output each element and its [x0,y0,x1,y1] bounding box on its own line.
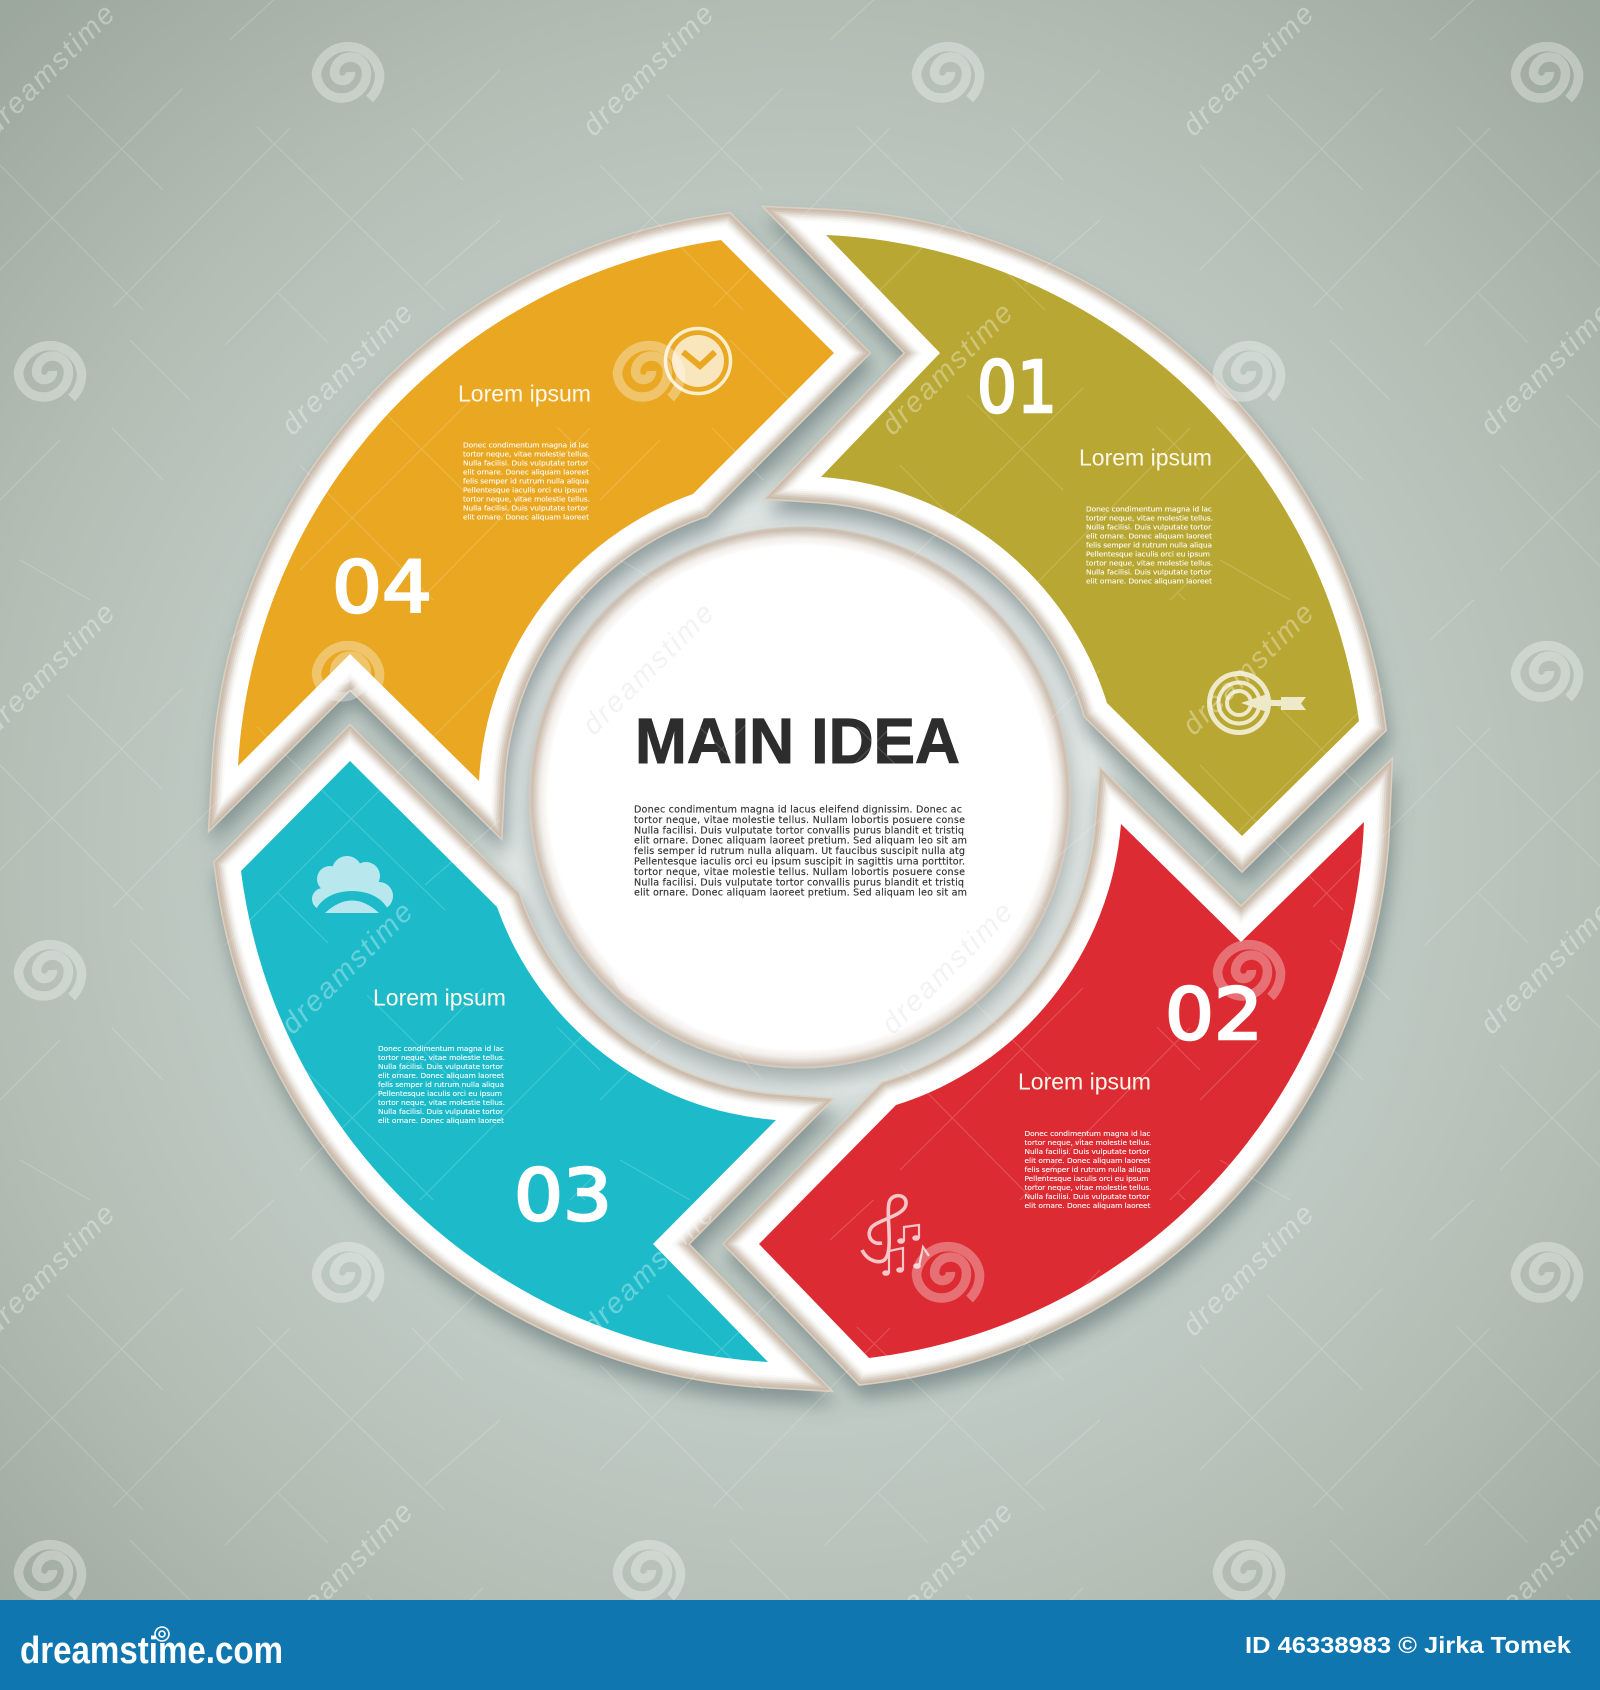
heading 01: Lorem ipsum [1079,444,1212,470]
body text 02: Nulla facilisi. Duis vulputate tortor [1024,1147,1150,1156]
body text 02: elit ornare. Donec aliquam laoreet [1024,1201,1151,1210]
body text 04: tortor neque, vitae molestie tellus. [463,450,590,458]
watermark overlay: dreamstime [275,1496,419,1640]
footer logo spiral [155,1627,169,1641]
inner light backing disc [465,463,1135,1133]
body text 03: felis semper id rutrum nulla aliqua [378,1080,504,1089]
central paragraph: tortor neque, vitae molestie tellus. Nullam lobortis posuere conse [634,867,965,878]
body text 02 [1024,1129,1152,1210]
number 03: 03 [514,1154,612,1237]
watermark overlay: dreamstime [875,896,1019,1040]
body text 01: Donec condimentum magna id lac [1086,504,1212,514]
panel: step 02 red arrow [759,822,1364,1358]
arrow shape teal [241,761,776,1362]
footer credit: ID 46338983 © Jirka Tomek [1245,1632,1571,1658]
central paragraph: elit ornare. Donec aliquam laoreet pretium. Sed aliquam leo sit am [634,836,967,847]
central paragraph: Donec condimentum magna id lacus eleifend dignissim. Donec ac [634,804,962,816]
body text 04: tortor neque, vitae molestie tellus. [463,494,590,504]
body text 01: tortor neque, vitae molestie tellus. [1086,558,1213,568]
arrow shape orange [238,240,834,781]
footer bar [0,1600,1600,1690]
body text 02: Nulla facilisi. Duis vulputate tortor [1024,1192,1150,1201]
body text 02: elit ornare. Donec aliquam laoreet [1024,1156,1151,1165]
body text 04: felis semper id rutrum nulla aliqua [463,476,589,486]
body text 01: Nulla facilisi. Duis vulputate tortor [1086,522,1212,532]
central paragraph: elit ornare. Donec aliquam laoreet pretium. Sed aliquam leo sit am [634,888,967,899]
body text 01: tortor neque, vitae molestie tellus. [1086,514,1213,522]
central paragraph: tortor neque, vitae molestie tellus. Nullam lobortis posuere conse [634,815,965,826]
watermark overlay: dreamstime [275,297,419,441]
number 04: 04 [332,546,432,629]
footer logo text: dreamstime.com [20,1630,283,1672]
central paragraph: felis semper id rutrum nulla aliquam. Ut faucibus suscipit nulla atg [634,846,965,857]
body text 01 [1086,504,1213,586]
body text 03: Pellentesque iaculis orci eu ipsum [378,1089,502,1098]
body text 04: Donec condimentum magna id lac [463,440,589,450]
body text 01: Pellentesque iaculis orci eu ipsum [1086,550,1210,558]
number 01: 01 [977,346,1057,429]
central circle [529,526,1071,1068]
central paragraph [634,804,967,899]
body text 03: Nulla facilisi. Duis vulputate tortor [378,1107,504,1116]
icon: music notes [862,1196,929,1276]
icon: clock [666,328,730,394]
heading 03: Lorem ipsum [373,984,506,1010]
body text 03: elit ornare. Donec aliquam laoreet [378,1071,504,1080]
body text 04: elit ornare. Donec aliquam laoreet [463,512,589,522]
heading 04: Lorem ipsum [458,380,591,406]
watermark overlay: dreamstime [875,1496,1019,1640]
body text 02: Donec condimentum magna id lac [1024,1129,1150,1138]
body text 03: Nulla facilisi. Duis vulputate tortor [378,1062,504,1071]
body text 02: Pellentesque iaculis orci eu ipsum [1024,1174,1148,1183]
panel: step 04 orange arrow [238,240,834,781]
body text 03: tortor neque, vitae molestie tellus. [378,1053,505,1062]
watermark overlay: dreamstime [1176,0,1320,142]
watermark overlay: dreamstime [576,597,720,741]
watermark overlay: dreamstime [275,896,419,1040]
arrow shape olive [821,235,1359,836]
central paragraph: Nulla facilisi. Duis vulputate tortor convallis purus blandit et tristiq [634,825,964,836]
watermark overlay: dreamstime [1176,1198,1320,1342]
body text 04 [463,440,590,522]
watermark overlay: dreamstime [1176,597,1320,741]
body text 04: elit ornare. Donec aliquam laoreet [463,468,589,476]
body text 02: tortor neque, vitae molestie tellus. [1024,1138,1152,1147]
icon: target and arrow [1210,674,1306,732]
body text 03: elit ornare. Donec aliquam laoreet [378,1116,504,1125]
arrow shape red [759,822,1364,1358]
heading 02: Lorem ipsum [1018,1068,1151,1094]
panel: step 03 teal arrow [241,761,776,1362]
watermark overlay: dreamstime [576,0,720,142]
body text 01: Nulla facilisi. Duis vulputate tortor [1086,568,1212,576]
central paragraph: Nulla facilisi. Duis vulputate tortor convallis purus blandit et tristiq [634,877,964,888]
title: MAIN IDEA [635,705,960,777]
body text 01: elit ornare. Donec aliquam laoreet [1086,576,1212,586]
body text 01: felis semper id rutrum nulla aliqua [1086,540,1212,550]
body text 03: tortor neque, vitae molestie tellus. [378,1098,505,1107]
icon: cloud [312,856,393,941]
watermark overlay: dreamstime [875,297,1019,441]
body text 03: Donec condimentum magna id lac [378,1044,504,1053]
body text 04: Nulla facilisi. Duis vulputate tortor [463,458,589,468]
body text 04: Pellentesque iaculis orci eu ipsum [463,486,587,494]
body text 04: Nulla facilisi. Duis vulputate tortor [463,504,589,512]
number 02: 02 [1165,973,1263,1056]
body text 03 [378,1044,505,1125]
central paragraph: Pellentesque iaculis orci eu ipsum suscipit in sagittis urna porttitor. [634,856,965,868]
body text 02: tortor neque, vitae molestie tellus. [1024,1183,1152,1192]
panel: step 01 olive arrow [821,235,1359,836]
watermark overlay: dreamstime [576,1198,720,1342]
body text 02: felis semper id rutrum nulla aliqua [1024,1165,1150,1174]
body text 01: elit ornare. Donec aliquam laoreet [1086,532,1212,540]
